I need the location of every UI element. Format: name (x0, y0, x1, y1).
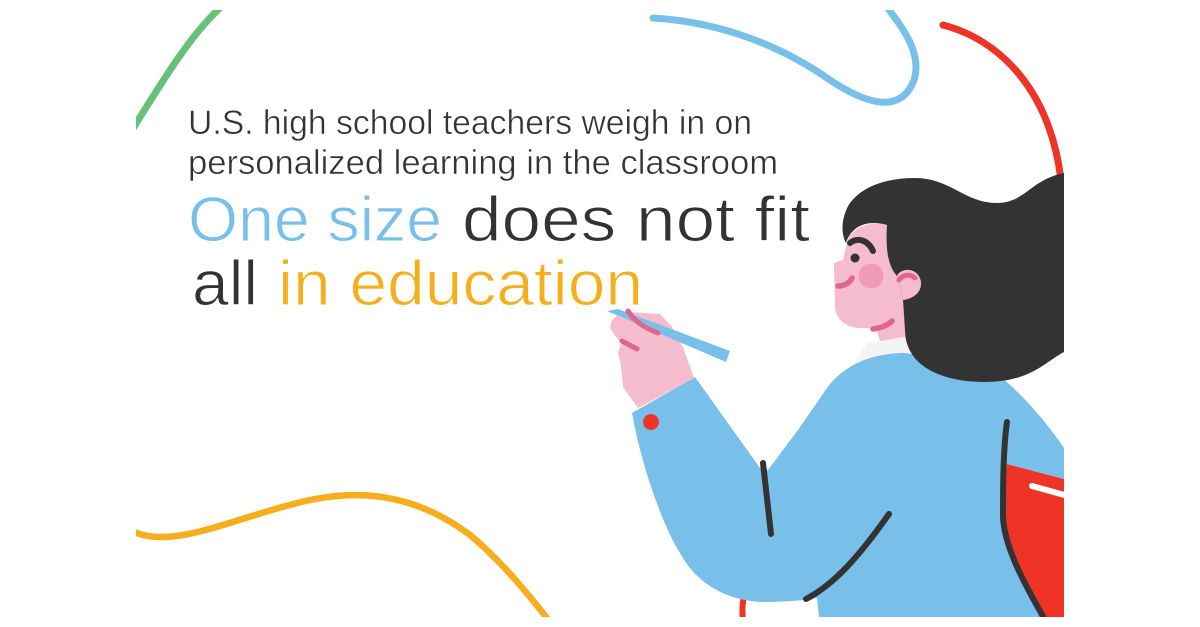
subtitle line 2: personalized learning in the classroom (188, 144, 778, 182)
finger (610, 316, 636, 341)
jaw line (873, 321, 892, 329)
headline: does not fit: does not fit (462, 185, 811, 255)
cheek (858, 264, 884, 288)
backpack highlight (1032, 486, 1068, 496)
decorative yellow curve (132, 495, 550, 622)
subtitle (188, 104, 778, 182)
headline: One size: One size (188, 185, 442, 255)
subtitle line 1: U.S. high school teachers weigh in on (188, 104, 752, 142)
headline (188, 185, 811, 319)
decorative blue curve (653, 6, 916, 102)
infographic canvas (136, 10, 1064, 617)
headline: in education: in education (278, 249, 643, 319)
neck and face (834, 224, 905, 341)
collar (854, 338, 912, 364)
ear (897, 270, 921, 300)
blue sweater (632, 353, 1064, 617)
headline: all: all (192, 249, 258, 319)
sweater right panel (1007, 448, 1064, 479)
elbow crease (763, 463, 771, 534)
cuff button (643, 414, 659, 430)
ear detail (899, 275, 915, 280)
decorative red curve bottom (742, 597, 744, 620)
artwork area (132, 6, 1068, 622)
backpack (1003, 464, 1064, 617)
sleeve crease (806, 514, 889, 599)
backpack strap (1003, 422, 1045, 620)
hand (611, 312, 694, 408)
eyebrow (850, 240, 873, 251)
decorative red curve (943, 25, 1061, 180)
finger line (628, 311, 658, 333)
hair (843, 173, 1064, 382)
eye (850, 254, 860, 262)
decorative green curve (132, 6, 222, 130)
finger crease (622, 341, 637, 349)
smile (838, 278, 852, 286)
teacher illustration (607, 173, 1068, 620)
pen (607, 309, 730, 362)
